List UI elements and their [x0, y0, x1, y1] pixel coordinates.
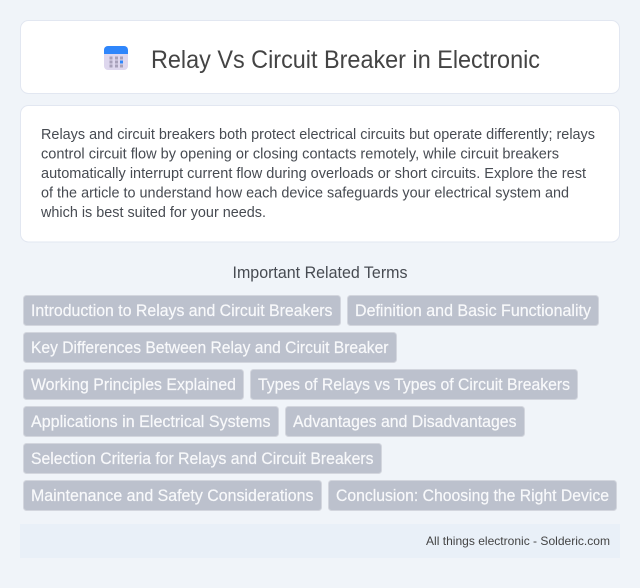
header card [20, 20, 620, 94]
tag: advantages: Advantages and Disadvantages [293, 413, 516, 431]
tag: working principles [24, 370, 244, 400]
panel: description [20, 106, 620, 242]
panel: description: which is best suited for your needs. [40, 205, 266, 221]
tag: key differences [24, 332, 396, 362]
tag: applications: Applications in Electrical Systems [31, 413, 270, 431]
panel: description: automatically interrupt current flow during overloads or short circuits. Explore the rest [41, 166, 586, 182]
tag: selection criteria [24, 444, 382, 474]
tag: definition [348, 296, 598, 326]
tag: maintenance [24, 480, 322, 510]
heading: related terms: Important Related Terms [232, 264, 408, 282]
tag: selection criteria: Selection Criteria for Relays and Circuit Breakers [31, 450, 374, 468]
tag: types: Types of Relays vs Types of Circuit Breakers [258, 376, 570, 394]
tag: introduction: Introduction to Relays and Circuit Breakers [31, 302, 332, 320]
tag: maintenance: Maintenance and Safety Considerations [31, 487, 314, 505]
tag: conclusion: Conclusion: Choosing the Right Device [336, 487, 609, 505]
tag: advantages [286, 406, 524, 436]
tag: applications [24, 406, 278, 436]
tag: definition: Definition and Basic Functionality [355, 302, 592, 320]
panel: description: control circuit flow by opening or closing contacts remotely, while circuit breakers [41, 146, 559, 162]
related terms tags [24, 296, 616, 510]
tag: conclusion [328, 480, 616, 510]
tag: types [250, 370, 578, 400]
footer: All things electronic - Solderic.com [426, 534, 610, 548]
footer [20, 524, 620, 558]
tag: working principles: Working Principles Explained [31, 376, 236, 394]
title: Relay Vs Circuit Breaker in Electronic [151, 46, 540, 74]
icon: calendar [104, 46, 128, 70]
panel: description: Relays and circuit breakers both protect electrical circuits but operate differently; relays [41, 127, 595, 143]
tag: introduction [24, 296, 340, 326]
panel: description: of the article to understand how each device safeguards your electrical system and [41, 186, 569, 202]
tag: key differences: Key Differences Between Relay and Circuit Breaker [31, 339, 389, 357]
